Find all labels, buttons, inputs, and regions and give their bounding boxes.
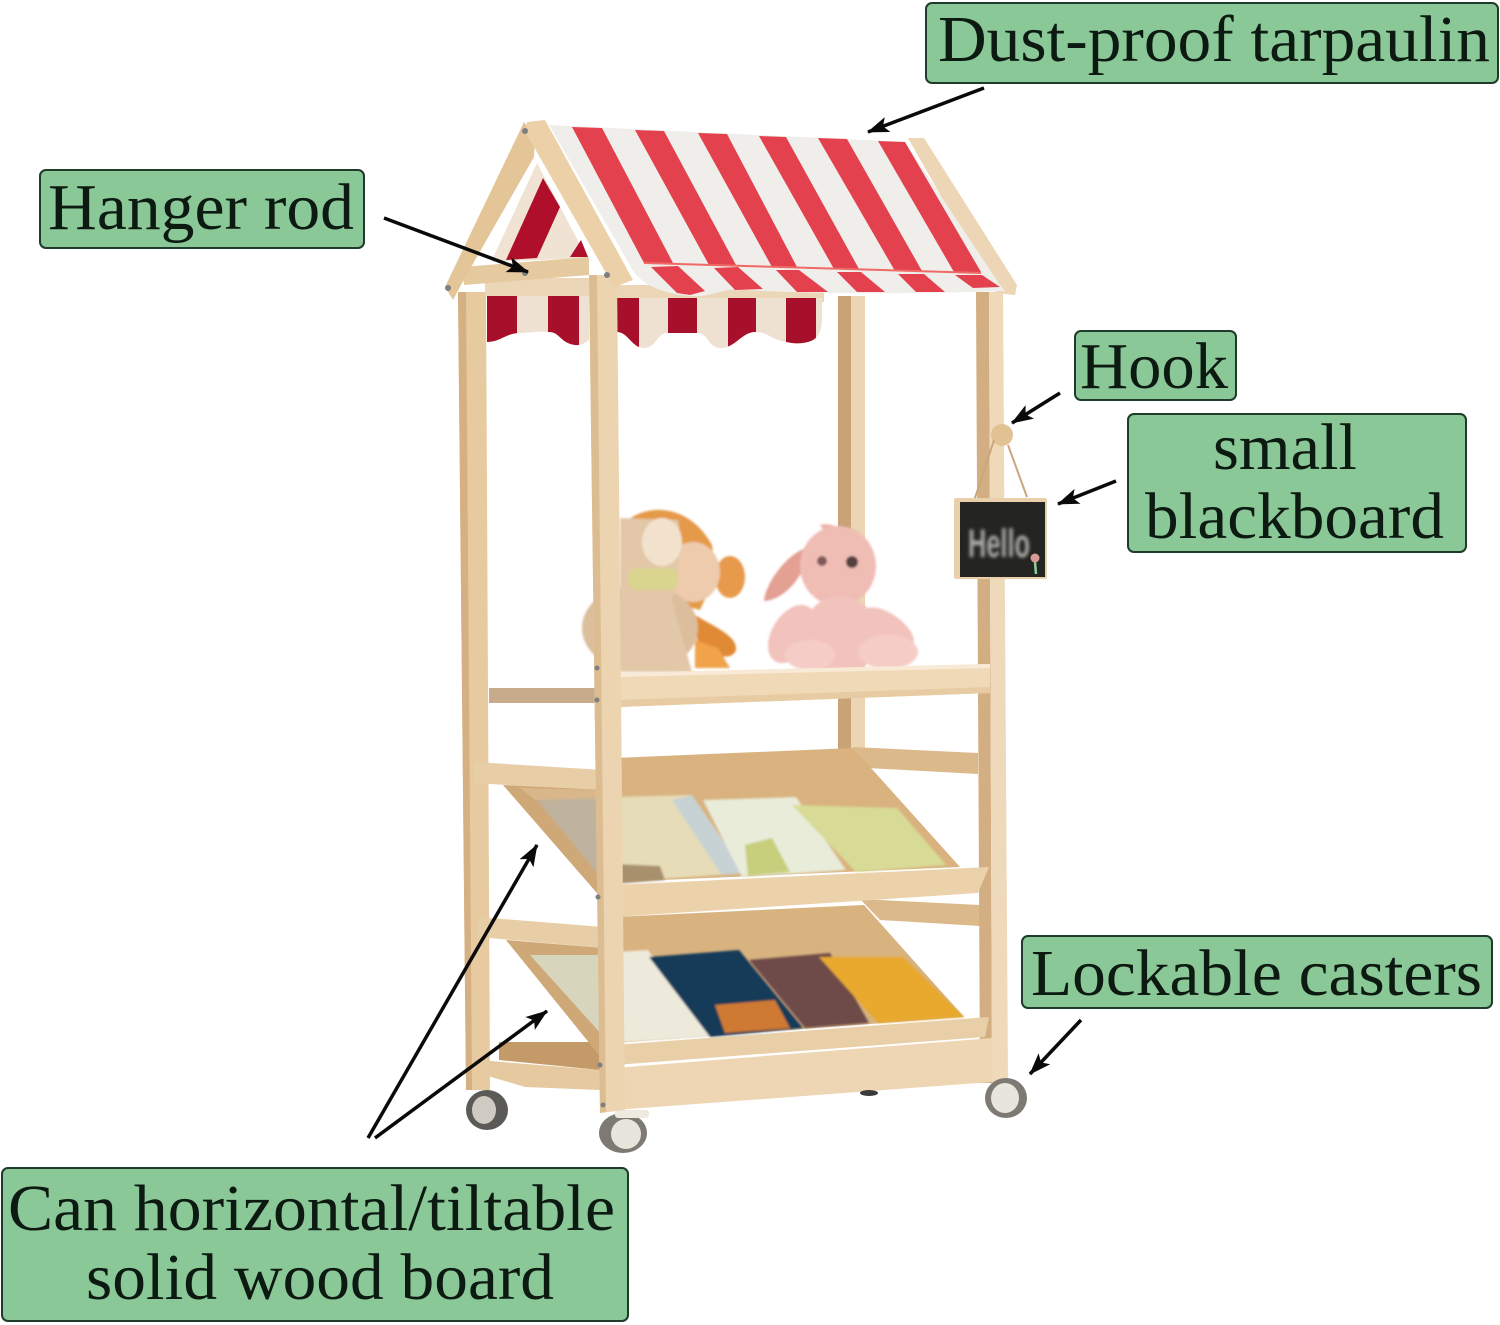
hanger rod [462, 257, 589, 285]
right post [976, 292, 1008, 1083]
bottom front beam [615, 1038, 992, 1110]
arrow: to hanger rod [384, 218, 528, 272]
lower tilted board [478, 905, 989, 1065]
caster: front centre [599, 1110, 649, 1153]
hidden caster [860, 1090, 878, 1096]
top shelf [489, 664, 990, 707]
roof frame [445, 120, 1017, 300]
label: lockable casters: Lockable casters [1031, 937, 1482, 1010]
toys on top shelf [582, 510, 921, 676]
arrow: to lower board [375, 1011, 547, 1138]
striped awning [549, 125, 1005, 296]
arrow: to blackboard [1058, 481, 1116, 504]
label: small blackboard [1128, 411, 1466, 553]
toy: lamb [582, 518, 698, 672]
label: tiltable solid wood board: Can horizontal/tiltable [8, 1172, 615, 1245]
board frame [954, 498, 1047, 579]
back rails [499, 747, 980, 1070]
back valance [485, 278, 824, 350]
right front rafter [526, 120, 633, 287]
label: tiltable solid wood board [2, 1168, 628, 1321]
left post [458, 292, 490, 1090]
centre front post [589, 275, 625, 1113]
caster: back left [466, 1090, 508, 1130]
caster: front right [985, 1078, 1027, 1118]
middle tilted board [474, 748, 989, 917]
board surface [960, 502, 1045, 577]
label: tiltable solid wood board: solid wood board [86, 1241, 554, 1314]
gable fabric [491, 163, 588, 262]
label: small blackboard: blackboard [1145, 480, 1444, 553]
arrow: to middle board [368, 845, 537, 1138]
label: small blackboard: small [1213, 411, 1357, 484]
toy: pink rabbit [758, 524, 921, 676]
back centre post [838, 296, 865, 751]
left rafter [445, 122, 535, 300]
chalk flower [1030, 554, 1040, 574]
small blackboard and hook [954, 424, 1047, 579]
hanging strings [972, 440, 1027, 507]
bottom left rail [478, 1060, 600, 1090]
arrow: to hook [1012, 393, 1060, 423]
toy: monkey [628, 510, 745, 668]
arrow: to casters [1030, 1020, 1081, 1074]
icon: hook peg [991, 424, 1013, 446]
books on lower board [615, 950, 964, 1043]
back right rafter [908, 138, 1017, 295]
label: hanger rod: Hanger rod [48, 171, 354, 244]
shop stand illustration [445, 120, 1047, 1153]
board chalk text: Hello [968, 522, 1030, 566]
books on middle board [537, 795, 946, 884]
label: dust-proof tarpaulin: Dust-proof tarpaulin [938, 3, 1490, 76]
label: hook: Hook [1080, 330, 1228, 403]
arrow: to tarpaulin [868, 88, 984, 132]
